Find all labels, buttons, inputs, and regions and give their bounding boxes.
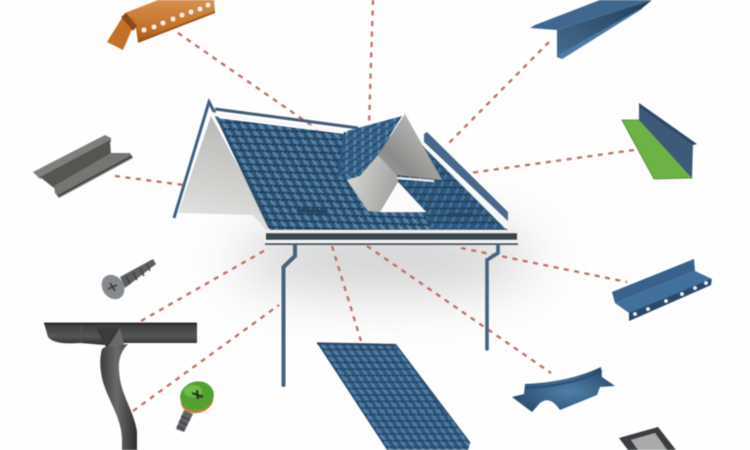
ridge flashing: [215, 109, 358, 128]
dormer front wall: [347, 155, 398, 212]
dormer opening: [380, 182, 426, 212]
silver screw: [97, 259, 156, 304]
blue drip edge top right: [530, 0, 652, 59]
main tiled roof surface: [217, 118, 508, 230]
roof left edge: [219, 122, 269, 228]
roof window: [619, 427, 676, 450]
house roof: [174, 102, 518, 245]
dormer side wall: [378, 114, 442, 180]
gutter underside white: [265, 240, 518, 243]
tile panel: [317, 343, 470, 450]
dormer flashing edge: [338, 132, 345, 177]
gable left barge board: [174, 102, 220, 218]
roof vent right: [447, 213, 473, 217]
gutter lip: [265, 243, 518, 245]
curved blue ridge end: [512, 367, 615, 412]
gable wall: [178, 116, 272, 232]
left downspout: [284, 245, 295, 385]
black gutter and downpipe: [44, 323, 197, 450]
eave white strip: [266, 230, 517, 233]
soft shadow under the roof: [235, 224, 535, 292]
orange ridge cap: [107, 0, 215, 50]
grey channel profile: [33, 135, 133, 198]
dashed leader lines: [115, 0, 634, 411]
white ridge strip: [212, 114, 340, 131]
blue perforated flashing: [612, 259, 712, 321]
right downspout: [487, 245, 498, 349]
roof vent left: [297, 208, 327, 214]
right ridge flashing: [424, 132, 508, 221]
dormer eave trim: [397, 178, 434, 181]
gutter bar: [266, 233, 517, 240]
right tiled slope shade: [397, 146, 508, 230]
dormer tiled roof: [340, 116, 402, 176]
green head screw: [176, 378, 217, 432]
green and blue angle flashing: [622, 103, 697, 179]
right white strip: [425, 146, 507, 228]
